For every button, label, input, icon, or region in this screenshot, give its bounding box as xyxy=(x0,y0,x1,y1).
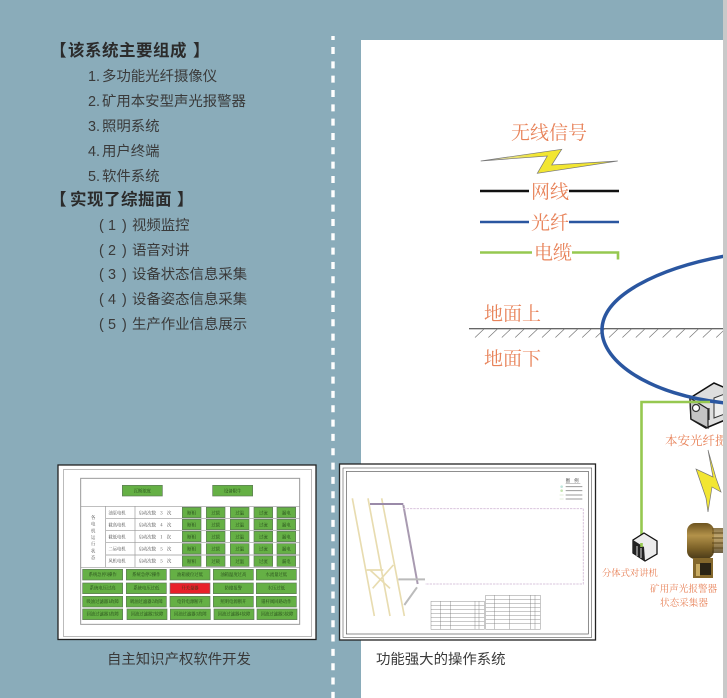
status table: 断相 xyxy=(187,521,197,528)
text block: achievements: ) xyxy=(122,317,127,333)
status table: 漏电 xyxy=(282,509,291,516)
mine roadways xyxy=(352,498,583,616)
status table: 系统电压过低 xyxy=(133,585,160,592)
label: below ground: 地面下 xyxy=(484,348,541,370)
status table: 过温 xyxy=(235,533,245,540)
status table: 启动次数 1 次 xyxy=(139,533,172,540)
text block: system composition: 软件系统 xyxy=(102,168,160,185)
status table: 水压过低 xyxy=(268,585,286,592)
text block: achievements: 生产作业信息展示 xyxy=(132,316,247,333)
status table: 防撞报警 xyxy=(225,585,243,592)
power cable route xyxy=(642,402,710,543)
text block: system composition: 5. xyxy=(88,169,100,185)
status table: 油箱温度过高 xyxy=(220,571,247,578)
label: alarm collector xyxy=(650,583,718,609)
text block: system composition: 多功能光纤摄像仪 xyxy=(102,68,217,85)
caption: operating system: 功能强大的操作系统 xyxy=(376,651,506,668)
text block: achievements: ) xyxy=(122,267,127,283)
map legend: 图 例 xyxy=(566,477,579,484)
status table: 瓦斯浓度 xyxy=(134,487,152,494)
status table: 电 xyxy=(91,521,96,528)
text block: system composition: 1. xyxy=(88,69,100,85)
legend: optical fibre: 光纤 xyxy=(531,212,569,234)
status table: 油箱液位过低 xyxy=(177,571,204,578)
status table: 断相 xyxy=(187,533,197,540)
status table xyxy=(81,478,300,624)
camera icon xyxy=(690,383,727,428)
legend: optical fibre xyxy=(480,212,619,234)
label: above ground: 地面上 xyxy=(484,303,541,325)
text block: achievements: 设备状态信息采集 xyxy=(132,266,247,283)
map legend xyxy=(560,477,582,499)
status table: 电铃电源断开 xyxy=(177,598,204,605)
status table: 系统电压过高 xyxy=(90,585,116,592)
ground line with hatching xyxy=(469,329,725,338)
text block: system composition: 矿用本安型声光报警器 xyxy=(102,92,246,110)
legend label: wireless: 无线信号 xyxy=(511,122,587,144)
status table: 过温 xyxy=(235,558,245,565)
status table: 回油过滤器4故障 xyxy=(218,611,251,618)
text block: achievements: 3 xyxy=(108,267,116,283)
status table: 锚杆阀回路动作 xyxy=(261,598,292,605)
legend: power cable: 电缆 xyxy=(534,242,572,264)
caption: software: 自主知识产权软件开发 xyxy=(107,651,251,668)
status table: 水流量过低 xyxy=(266,571,288,578)
text block: achievements: 语音对讲 xyxy=(132,242,190,259)
status table: 启动次数 3 次 xyxy=(139,509,172,516)
status table: 各 xyxy=(91,514,96,521)
operating system map panel xyxy=(340,464,596,640)
status table: 过载 xyxy=(211,509,221,516)
legend: network cable: 网线 xyxy=(531,181,569,203)
text block: achievements xyxy=(50,189,247,333)
text block: achievements: ) xyxy=(122,218,127,234)
status table: 回油过滤器2故障 xyxy=(131,611,164,618)
status table: 过载 xyxy=(211,521,221,528)
status table: 断相 xyxy=(187,546,197,553)
text block: achievements: 4 xyxy=(108,292,116,308)
legend: network cable xyxy=(480,181,619,203)
icon: alarm collector xyxy=(687,523,724,578)
text block: system composition: 4. xyxy=(88,144,100,160)
software screenshot panel xyxy=(58,465,316,640)
status table: 过载 xyxy=(211,558,221,565)
status table: 漏电 xyxy=(282,533,291,540)
status table: 系统急停1操作 xyxy=(89,571,117,578)
status table: 行 xyxy=(91,541,96,548)
text block: achievements: ( xyxy=(99,317,104,333)
status table: 过载 xyxy=(211,533,221,540)
status table: 断相 xyxy=(187,509,197,516)
status table: 漏电 xyxy=(282,521,291,528)
label: alarm collector: 矿用声光报警器 xyxy=(650,583,718,595)
status table: 漏电 xyxy=(282,558,291,565)
status table: 漏电 xyxy=(282,546,291,553)
status table: 二运电机 xyxy=(108,546,126,553)
status table: 开关量器 xyxy=(181,585,199,592)
status table: 照明电源断开 xyxy=(220,598,247,605)
fibre loop xyxy=(602,256,725,403)
legend: power cable xyxy=(480,242,618,264)
icon: intercom xyxy=(633,533,657,561)
text block: achievements: ( xyxy=(99,292,104,308)
heading: achievements: 实现了综掘面 xyxy=(70,189,172,209)
status table: 吸油过滤器1故障 xyxy=(86,598,120,605)
text block: system composition: 3. xyxy=(88,119,100,135)
status table: 态 xyxy=(91,554,96,561)
heading: composition: 该系统主要组成 xyxy=(68,40,187,60)
status table: 过温 xyxy=(235,509,245,516)
status table: 风机电机 xyxy=(108,558,126,565)
status table: 过温 xyxy=(235,546,245,553)
status table: 过流 xyxy=(259,558,268,565)
heading: composition: 【 xyxy=(50,41,67,60)
heading: achievements: 】 xyxy=(177,190,194,209)
text block: system composition: 照明系统 xyxy=(102,118,160,135)
map title block xyxy=(431,595,540,629)
status table: 设备限牛 xyxy=(224,487,242,494)
status table: 回油过滤器1故障 xyxy=(86,611,120,618)
text block: achievements: ( xyxy=(99,267,104,283)
status table: 过流 xyxy=(259,533,268,540)
status table: 状 xyxy=(91,547,96,554)
status table: 启动次数 5 次 xyxy=(139,546,172,553)
icon: wireless bolt vertical xyxy=(696,450,721,512)
text block: achievements: ( xyxy=(99,218,104,234)
status table: 截低电机 xyxy=(108,533,126,540)
text block: system composition: 用户终端 xyxy=(102,143,160,160)
status table: 系统急停2操作 xyxy=(132,571,161,578)
text block: achievements: ( xyxy=(99,243,104,259)
right edge strip xyxy=(723,0,727,698)
status table: 回油过滤器3故障 xyxy=(174,611,207,618)
status table: 过流 xyxy=(259,546,268,553)
heading: achievements: 【 xyxy=(50,190,67,209)
label: alarm collector: 状态采集器 xyxy=(660,597,708,609)
status table: 过流 xyxy=(259,509,268,516)
status table: 断相 xyxy=(187,558,197,565)
text block: achievements: 视频监控 xyxy=(132,217,190,234)
dashed divider xyxy=(331,36,335,698)
status table: 过流 xyxy=(259,521,268,528)
status table: 截高电机 xyxy=(108,521,126,528)
text block: achievements: 2 xyxy=(108,243,116,259)
heading: composition: 】 xyxy=(193,41,210,60)
status table: 回油过滤器5故障 xyxy=(261,611,294,618)
status table: 过温 xyxy=(235,521,245,528)
legend: signal types xyxy=(480,122,619,264)
label: intercom: 分体式对讲机 xyxy=(602,567,658,579)
status table: 启动次数 4 次 xyxy=(139,521,172,528)
status table: 吸油过滤器2故障 xyxy=(130,598,163,605)
status table: 启动次数 5 次 xyxy=(139,558,172,565)
status table: 机 xyxy=(91,527,96,534)
icon: wireless bolt xyxy=(481,149,618,173)
text block: achievements: 1 xyxy=(108,218,116,234)
status table: 油泵电机 xyxy=(108,509,126,516)
text block: achievements: ) xyxy=(122,292,127,308)
text block: system composition xyxy=(50,40,246,185)
text block: achievements: ) xyxy=(122,243,127,259)
status table: 运 xyxy=(91,534,96,541)
status table: 过载 xyxy=(211,546,221,553)
text block: achievements: 5 xyxy=(108,317,116,333)
text block: achievements: 设备姿态信息采集 xyxy=(132,291,247,308)
white diagram panel xyxy=(361,40,723,698)
text block: system composition: 2. xyxy=(88,94,100,110)
